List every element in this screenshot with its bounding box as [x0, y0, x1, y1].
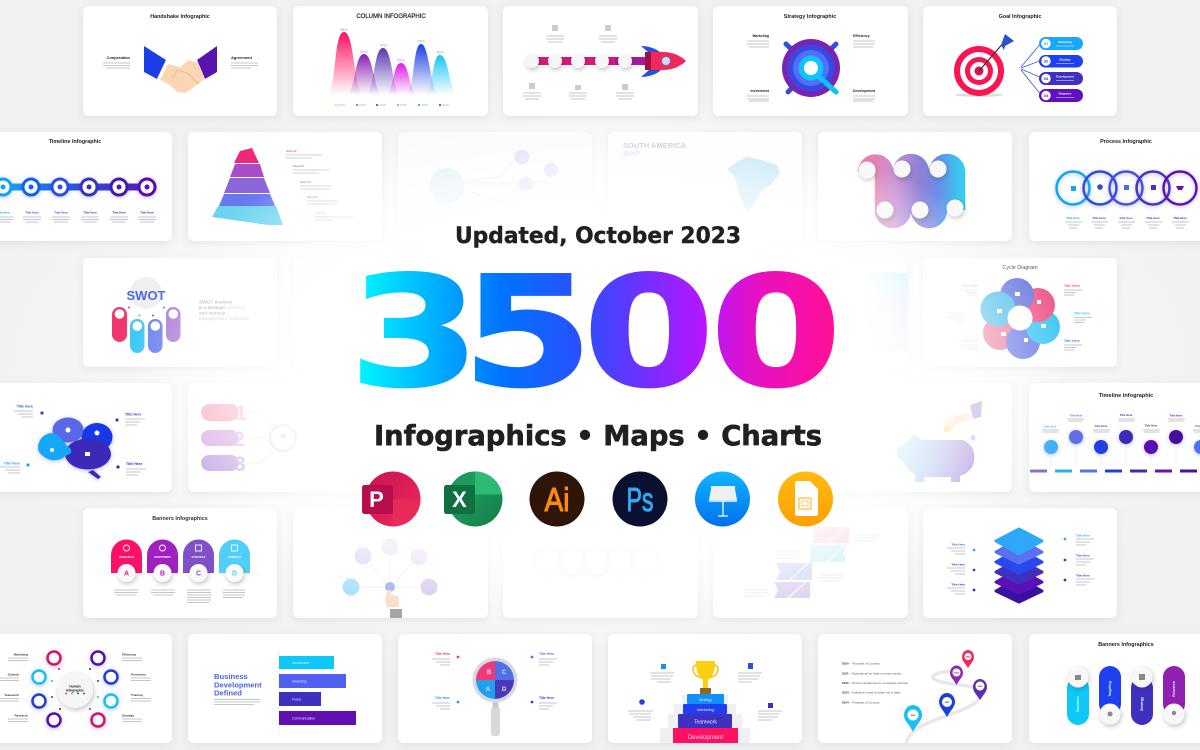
icon: magnifier: D	[502, 687, 507, 693]
chart: bell columns: 60%	[436, 50, 444, 54]
banner letter buttons: A	[124, 570, 129, 578]
process labels: Title Here	[1066, 216, 1080, 220]
label: cooperation	[103, 55, 131, 68]
banner numerals: 1	[235, 402, 247, 425]
swot heading	[126, 277, 166, 309]
pill buttons	[1068, 666, 1184, 724]
timeline labels: Title Here	[54, 210, 68, 214]
banners title: Banners Infographics	[152, 516, 208, 522]
goal pills: 02	[1044, 58, 1049, 64]
timeline heading: Timeline Infographic	[1099, 393, 1153, 399]
banner letter buttons	[118, 564, 244, 582]
pyramid steps text: Step 01	[286, 149, 297, 153]
panel: process infographic	[1029, 132, 1200, 241]
chart: bell columns: 61%	[360, 50, 368, 54]
icon: excel: X	[452, 487, 467, 512]
process labels: Title Here	[1119, 216, 1133, 220]
panel: arrow tiles	[713, 508, 908, 618]
vertical pills: Research	[1172, 681, 1176, 697]
chart legend	[335, 104, 449, 106]
left labels: Marketing	[14, 652, 28, 656]
swot description	[199, 300, 250, 322]
arrow tiles chart	[774, 527, 849, 598]
panel: network faded	[398, 132, 592, 241]
icon: target with dart	[954, 34, 1014, 97]
cycle labels right: Title Here	[1064, 339, 1080, 343]
panel: faded rings	[503, 508, 698, 618]
right labels	[122, 652, 151, 722]
right labels: Promotion	[131, 672, 146, 676]
icon: hand and coin	[944, 401, 982, 432]
icon: powerpoint: P	[369, 487, 384, 512]
icon: pointing hand	[385, 590, 402, 618]
pyramid steps text: Step 04	[307, 195, 318, 199]
swot description: is a strategic planning	[199, 305, 246, 311]
icon: trophy	[693, 661, 718, 694]
icon: strategy target	[782, 39, 840, 97]
strategy labels	[747, 34, 876, 101]
icon: magnifier: B	[487, 670, 492, 676]
banners title: Banners Infographics	[1098, 642, 1154, 648]
brain labels	[0, 404, 146, 475]
banner numerals: 3	[234, 453, 246, 476]
goal pills: Diagrams	[1059, 92, 1072, 96]
panel: faded blank card row four	[398, 383, 592, 492]
trophy icons and notes	[628, 663, 782, 720]
goal fan lines	[1021, 42, 1042, 96]
timeline captions: Title Here	[1145, 424, 1158, 428]
location pins: 2020	[911, 715, 916, 717]
location pins: 2021	[945, 702, 950, 704]
business heading: Defined	[214, 688, 242, 698]
right labels: Strategy	[122, 714, 134, 718]
magnifier labels: Title Here	[435, 652, 450, 656]
timeline labels: Title Here	[112, 210, 126, 214]
vertical pills: Targeting	[1108, 681, 1112, 697]
banner arches: RESEARCH	[119, 555, 134, 559]
panel: column infographic	[293, 6, 488, 116]
icon: magnifier: C	[502, 670, 507, 676]
chart: cycle flower	[980, 278, 1060, 359]
radial diagram	[342, 538, 438, 596]
panel: faded blank card	[293, 258, 488, 367]
icon: photoshop: Ps	[626, 481, 654, 518]
icon: keynote	[695, 472, 750, 526]
location pins: 2023	[954, 672, 960, 674]
panel: handshake infographic	[83, 6, 277, 116]
swot description: and strategic	[199, 310, 227, 316]
goal pills: Strategy	[1059, 58, 1071, 62]
chart: stacked layers	[996, 529, 1042, 602]
satellite dots	[51, 668, 99, 710]
goal title: Goal Infographic	[999, 14, 1041, 20]
cycle labels left: Title Here	[962, 284, 978, 288]
right labels: Efficiency	[122, 652, 137, 656]
headline: 3500 gradient number: 0	[710, 243, 842, 422]
map shape	[727, 157, 780, 211]
timeline circles	[1044, 430, 1200, 454]
pyramid steps text: Step 03	[300, 180, 311, 184]
headline: 3500 gradient number	[349, 243, 842, 422]
left labels: Research	[14, 714, 28, 718]
process labels: Title Here	[1146, 216, 1160, 220]
timeline labels: Title Here	[83, 210, 97, 214]
location pins: 2024	[966, 656, 971, 658]
faint rings	[534, 548, 659, 576]
panel: banners infographics	[83, 508, 277, 618]
goal pills: 04	[1044, 93, 1049, 98]
magnifier labels	[432, 652, 557, 709]
chart: bell columns: 75%	[417, 40, 425, 44]
side stairs	[660, 695, 750, 743]
year rows: 2023 – Ambitions voted to reform all of data	[842, 690, 900, 694]
icon: photoshop	[612, 472, 668, 526]
business bars: Focus	[292, 698, 301, 702]
timeline chain	[0, 179, 155, 195]
road	[906, 671, 981, 743]
banner arches: BUSINESS	[228, 555, 241, 559]
chart: 3d pyramid	[212, 148, 283, 225]
cycle labels left	[947, 284, 978, 350]
timeline labels: Title Here	[140, 210, 154, 214]
headline: 3500 gradient number: 5	[461, 243, 594, 422]
panel: goal infographic	[923, 6, 1117, 116]
banner hub	[248, 412, 296, 463]
banner letter buttons: D	[232, 570, 237, 578]
panel: timeline right	[1029, 383, 1200, 492]
satellite rings	[32, 652, 118, 726]
headline: updated date: Updated, October 2023	[455, 224, 741, 249]
panel: human infographic	[0, 634, 172, 743]
panel: south america map	[608, 132, 802, 241]
stair steps: Development	[688, 735, 724, 741]
process labels	[1065, 216, 1189, 228]
banner arches	[100, 540, 260, 574]
magnifier labels: Title Here	[435, 696, 450, 700]
business bars: Marketing	[292, 680, 307, 684]
year rows: 2020 – Template of Concept	[842, 662, 880, 666]
center sphere	[57, 672, 93, 708]
ribbon path	[867, 163, 956, 219]
timeline captions	[1042, 413, 1200, 432]
panel: magnifier puzzle	[398, 634, 592, 743]
cycle title: Cycle Diagram	[1002, 265, 1038, 271]
pyramid steps text: Step 02	[293, 164, 304, 168]
icon: brain	[38, 418, 112, 479]
timeline baseline bars	[1030, 445, 1200, 471]
year rows: 2022 – Great in department in a negative seminar	[842, 681, 908, 685]
brain labels: Title Here	[4, 462, 20, 466]
banner letter buttons: C	[196, 570, 201, 578]
layers labels right: Title Here	[1076, 534, 1090, 538]
icon: rocket	[641, 46, 686, 77]
panel: rocket timeline	[503, 6, 698, 116]
brain labels: Title Here	[126, 462, 142, 466]
panel: pyramid	[188, 132, 382, 241]
process icons	[1071, 184, 1184, 191]
banner numerals	[233, 402, 247, 476]
icon: handshake	[144, 46, 217, 93]
strategy labels: Investment	[751, 89, 770, 93]
rocket track	[525, 54, 650, 68]
layers labels left: Title Here	[951, 542, 965, 546]
year rows: 2021 – Data placed on Atlas in report section	[842, 672, 902, 676]
process title: Process Infographic	[1100, 139, 1152, 145]
panel: swot	[83, 258, 277, 367]
vertical pills: Strategy	[1140, 697, 1144, 711]
magnifier labels: Title Here	[539, 696, 554, 700]
layers labels left	[947, 542, 975, 594]
location pins: 2022	[978, 686, 983, 688]
ghost chart	[857, 273, 908, 350]
map title: MAP	[623, 149, 640, 158]
map title	[623, 141, 687, 158]
panel: business development	[188, 634, 382, 743]
panel: hand radial	[293, 508, 488, 618]
brain labels: Title Here	[125, 412, 141, 416]
timeline title: Timeline Infographic	[49, 139, 101, 145]
icon: magnifier	[472, 658, 518, 736]
banner arches: INVESTMENT	[154, 555, 171, 559]
banner notes	[114, 590, 245, 602]
network diagram	[430, 150, 558, 204]
panel: piggy bank	[818, 383, 1012, 492]
business heading	[214, 672, 262, 698]
timeline captions: Title Here	[1070, 414, 1083, 418]
center sphere: Human	[69, 684, 81, 688]
business body	[214, 700, 260, 704]
timeline captions: Title Here	[1095, 424, 1108, 428]
stair steps	[673, 694, 738, 743]
stair steps: Teamwork	[694, 720, 717, 726]
rocket step notes	[523, 25, 634, 99]
panel: vertical banners	[1029, 634, 1200, 743]
year rows	[842, 662, 908, 704]
label: cooperation: Cooperation	[106, 55, 131, 60]
handshake title: Handshake Infographic	[150, 14, 210, 20]
cycle labels right: Title Here	[1074, 312, 1090, 316]
arrow notes	[744, 535, 879, 596]
goal pills: Development	[1056, 74, 1074, 78]
center sphere: Infographic	[66, 688, 84, 692]
pyramid steps text	[286, 149, 353, 220]
stair steps: Marketing	[697, 707, 714, 712]
chart: bell columns	[328, 28, 456, 95]
icon: powerpoint	[362, 472, 420, 526]
process rings	[1056, 172, 1196, 204]
chart: bell columns: 85%	[340, 28, 348, 32]
panel: strategy infographic	[713, 6, 908, 116]
brain labels: Title Here	[17, 404, 33, 408]
icon: magnifier: A	[486, 687, 491, 693]
strategy labels: Efficiency	[853, 34, 870, 38]
icon: excel	[444, 472, 502, 526]
left labels: Teamwork	[4, 693, 19, 697]
left labels: Outlook	[8, 672, 19, 676]
vertical pills: Business	[1076, 696, 1080, 712]
ribbon buttons	[858, 160, 964, 218]
business heading: Development	[214, 680, 262, 690]
cycle labels left: Title Here	[962, 339, 978, 343]
panel: wave ribbons	[818, 132, 1012, 241]
panel: brain infographic	[0, 383, 172, 492]
column chart title: COLUMN INFOGRAPHIC	[356, 14, 426, 20]
swot pills	[112, 306, 180, 353]
map title: SOUTH AMERICA	[623, 141, 687, 150]
layers labels right: Title Here	[1076, 554, 1090, 558]
icon: illustrator	[530, 472, 584, 526]
panel: timeline infographic	[0, 132, 172, 241]
headline: infographics maps charts: Infographics • Maps • Charts	[374, 420, 822, 452]
headline: 3500 gradient number: 0	[583, 243, 715, 422]
strategy labels: Development	[853, 89, 876, 93]
layers labels left: Title Here	[951, 562, 965, 566]
icon: piggy bank	[897, 434, 976, 482]
swot description: management technique.	[199, 316, 250, 322]
swot heading: SWOT	[126, 288, 166, 303]
stair steps: Strategy	[699, 698, 712, 702]
goal pills: 01	[1044, 41, 1049, 46]
business bars	[279, 650, 356, 735]
magnifier labels: Title Here	[539, 652, 554, 656]
label: agreement: Agreement	[231, 55, 253, 60]
cycle labels left: Title Here	[949, 312, 965, 316]
panel: map pins	[818, 634, 1012, 743]
timeline labels	[0, 210, 156, 222]
white centre glow	[130, 113, 1070, 637]
banner pills	[201, 404, 239, 471]
goal pills: Marketing	[1058, 40, 1072, 44]
chart: bell columns: 70%	[379, 44, 387, 48]
icon: illustrator: Ai	[544, 481, 570, 518]
panel: trophy stairs	[608, 634, 802, 743]
location pins	[904, 650, 987, 732]
year rows: 2024 – Template of Concept	[842, 700, 880, 704]
strategy title: Strategy Infographic	[784, 14, 836, 20]
business bars: Communication	[292, 716, 315, 720]
process labels: Title Here	[1173, 216, 1187, 220]
swot description: SWOT analysis	[199, 300, 233, 306]
goal pills	[1039, 37, 1083, 102]
strategy labels: Marketing	[752, 34, 769, 38]
panel: cycle diagram	[923, 258, 1117, 367]
business heading: Business	[214, 672, 248, 681]
timeline captions: Title Here	[1044, 424, 1057, 428]
panel: layers	[923, 508, 1117, 618]
vertical pills	[1067, 666, 1185, 725]
right labels: Training	[131, 693, 143, 697]
icon: google slides	[778, 472, 833, 526]
layers labels right: Title Here	[1076, 574, 1090, 578]
banner arches: STRATEGY	[192, 555, 206, 559]
label: agreement	[231, 55, 258, 68]
pyramid steps text: Step 05	[315, 211, 326, 215]
timeline labels: Title Here	[25, 210, 39, 214]
chart: bell columns: 51%	[397, 58, 405, 62]
goal pills: 03	[1044, 76, 1049, 81]
cycle labels right: Title Here	[1064, 284, 1080, 288]
banner letter buttons: B	[160, 570, 165, 578]
panel: numbered banners	[188, 383, 382, 492]
left labels	[0, 652, 28, 722]
layers labels left: Title Here	[951, 582, 965, 586]
process labels: Title Here	[1092, 216, 1106, 220]
business bars: Introduction	[292, 661, 309, 665]
timeline captions: Title Here	[1170, 414, 1183, 418]
banner numerals: 2	[233, 428, 245, 451]
cycle labels right	[1064, 284, 1092, 350]
panel: faded chart card	[713, 258, 908, 367]
layers labels right	[1064, 534, 1094, 585]
timeline captions: Title Here	[1120, 413, 1133, 417]
headline: 3500 gradient number: 3	[349, 243, 481, 422]
